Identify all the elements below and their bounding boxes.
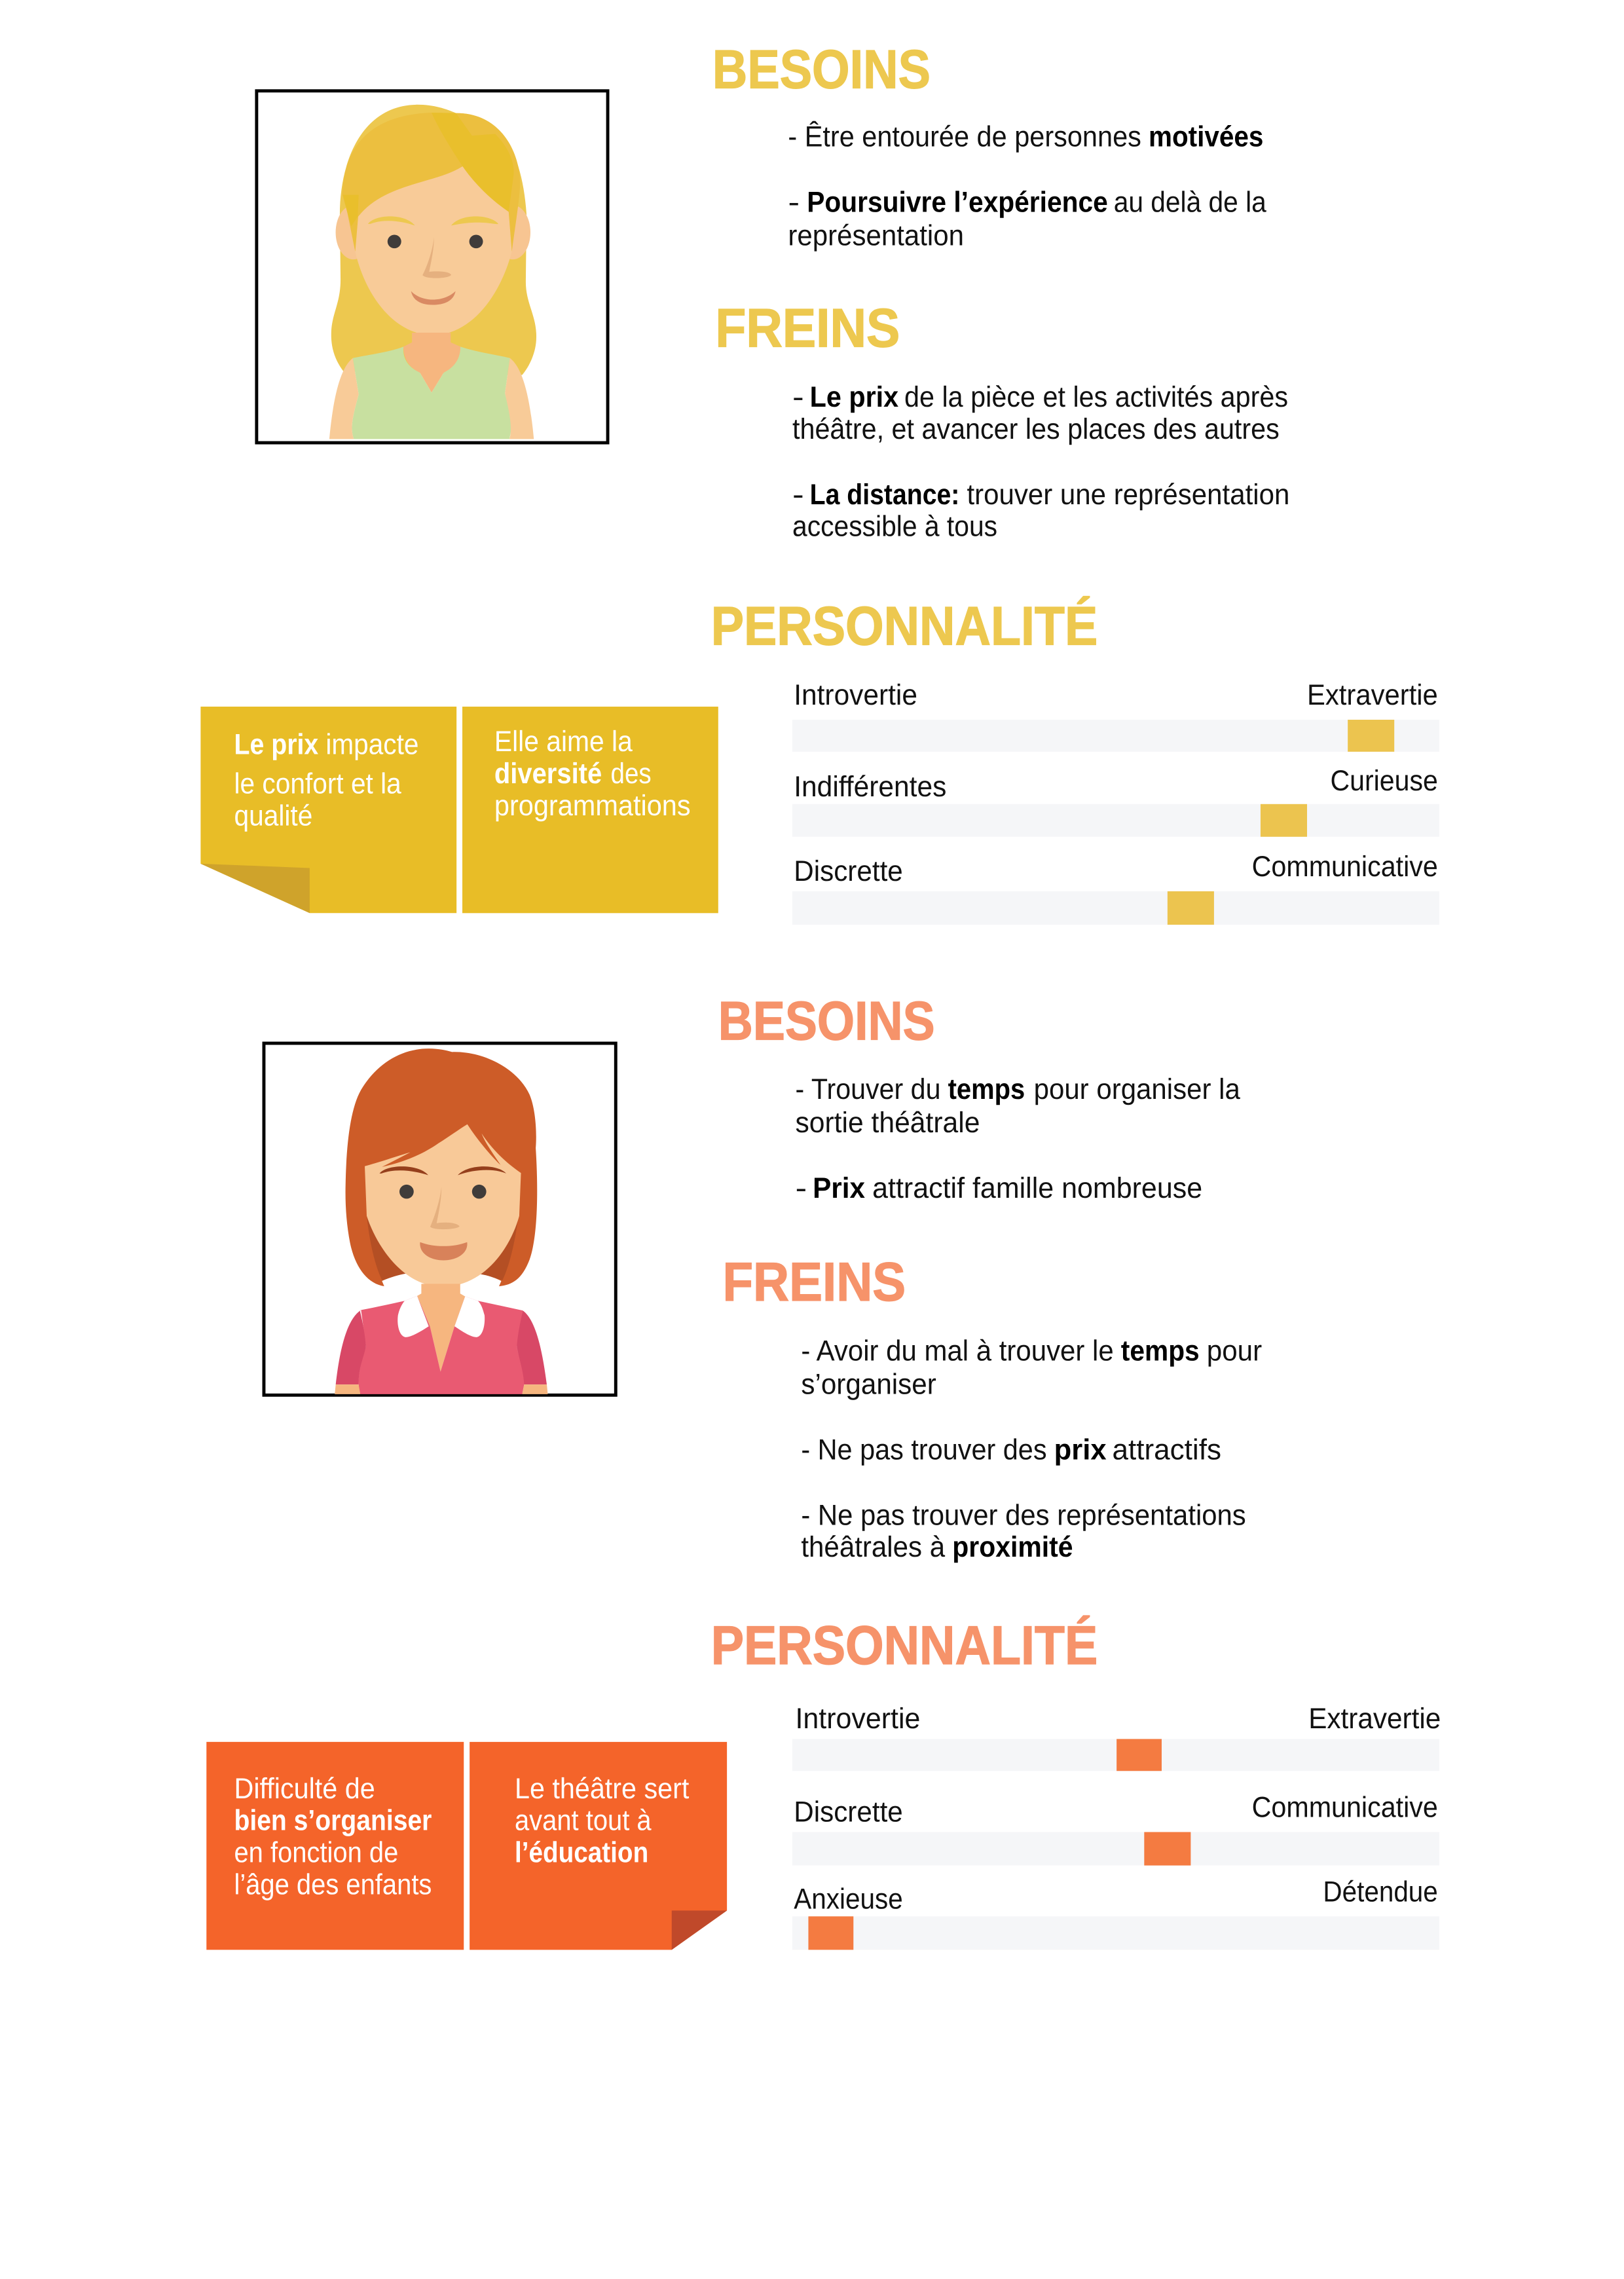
persona 1: obstacles text: Le prix: [810, 382, 898, 414]
persona 2: needs text: [795, 1074, 1242, 1205]
persona 1: note on diversity: programmations: [494, 790, 691, 823]
persona 1: obstacles text: de la pièce et les activités après: [904, 382, 1288, 414]
persona 2: obstacles heading: FREINS: [722, 1251, 906, 1312]
persona 1: needs heading: BESOINS: [712, 39, 931, 100]
persona 2: obstacles text: temps: [1121, 1336, 1200, 1368]
persona 2: obstacles text: s’organiser: [801, 1369, 937, 1401]
persona 2: slider discreet to communicative: Communicative: [1252, 1792, 1438, 1825]
persona 2: obstacles text: pour: [1207, 1336, 1263, 1368]
persona 1: obstacles text: La distance:: [810, 479, 959, 511]
persona 1: slider introvert to extravert: Extravertie: [1307, 680, 1438, 712]
persona 2: slider introvert to extravert: Introvertie: [795, 1703, 920, 1735]
persona 1: needs text: -: [788, 187, 800, 219]
persona 2: personality heading: PERSONNALITÉ: [711, 1615, 1098, 1676]
persona 2: slider discreet to communicative: Discrette: [794, 1797, 903, 1828]
persona 1: obstacles heading: FREINS: [715, 297, 900, 358]
persona 1: slider discreet to communicative: [792, 851, 1439, 925]
persona 1: slider introvert to extravert: [792, 680, 1439, 752]
persona 2: obstacles text: - Avoir du mal à trouver le: [801, 1336, 1114, 1368]
persona 1: needs text: [788, 120, 1268, 253]
persona 2: note on education: [470, 1742, 727, 1950]
persona 1: obstacles text: -: [792, 479, 804, 511]
persona 2: needs text: temps: [948, 1074, 1025, 1106]
persona 1: slider introvert to extravert: Introvertie: [794, 680, 917, 712]
persona 2: needs text: -: [795, 1173, 807, 1205]
persona 2: needs text: Prix: [813, 1173, 865, 1205]
persona 1: obstacles text: trouver une représentation: [967, 479, 1289, 511]
persona 1: slider discreet to communicative: Discrette: [794, 856, 903, 888]
persona 2: slider introvert to extravert: Extravertie: [1308, 1703, 1441, 1735]
persona 1: obstacles text: [792, 382, 1289, 544]
persona 2: note on organisation: en fonction de: [234, 1838, 398, 1870]
persona 2: obstacles text: prix: [1054, 1435, 1107, 1467]
persona 1: note on diversity: Elle aime la: [494, 726, 634, 758]
persona 1: note on price: qualité: [234, 801, 312, 833]
persona 2: portrait of red-haired woman: [264, 1043, 616, 1395]
persona 1: obstacles text: théâtre, et avancer les places des autres: [792, 414, 1280, 446]
persona 1: note on price: impacte: [325, 730, 418, 762]
persona 2: needs text: - Trouver du: [795, 1074, 940, 1106]
persona 1: needs text: Poursuivre l’expérience: [807, 187, 1108, 219]
persona 1: slider indifferent to curious: Indifférentes: [794, 771, 946, 804]
persona 1: obstacles text: accessible à tous: [792, 511, 997, 544]
persona 2: slider introvert to extravert: [792, 1703, 1441, 1771]
persona 2: slider anxious to relaxed: Anxieuse: [794, 1884, 903, 1916]
persona 1: slider indifferent to curious: Curieuse: [1331, 766, 1438, 798]
persona 1: needs text: au delà de la: [1114, 187, 1268, 219]
persona 1: needs text: - Être entourée de personnes: [788, 120, 1141, 154]
persona 2: note on education: Le théâtre sert: [515, 1773, 690, 1806]
persona 2: needs text: pour organiser la: [1034, 1074, 1242, 1106]
persona 2: needs heading: BESOINS: [718, 990, 935, 1051]
persona 1: needs text: représentation: [788, 221, 964, 253]
persona 1: note on price: [200, 707, 456, 913]
persona 2: obstacles text: attractifs: [1112, 1435, 1221, 1467]
persona 1: note on diversity: [462, 707, 718, 913]
persona 2: note on organisation: Difficulté de: [234, 1773, 375, 1806]
persona 2: needs text: attractif famille nombreuse: [872, 1173, 1202, 1205]
persona 2: needs text: sortie théâtrale: [795, 1107, 980, 1140]
persona 1: note on price: Le prix: [234, 730, 318, 762]
persona 1: needs text: motivées: [1149, 122, 1263, 154]
persona 2: obstacles text: [801, 1336, 1263, 1564]
persona 2: note on organisation: [206, 1742, 464, 1950]
persona 2: obstacles text: - Ne pas trouver des: [801, 1435, 1047, 1467]
persona 1: note on price: le confort et la: [234, 769, 403, 801]
persona 1: slider discreet to communicative: Communicative: [1252, 851, 1438, 883]
persona 2: obstacles text: théâtrales à: [801, 1532, 946, 1564]
persona 1: obstacles text: -: [792, 382, 804, 414]
persona 1: portrait of blonde woman: [257, 91, 608, 443]
persona 1: personality heading: PERSONNALITÉ: [711, 595, 1098, 656]
persona 1: note on diversity: des: [610, 758, 652, 790]
persona 2: obstacles text: proximité: [952, 1532, 1073, 1564]
persona 2: note on education: l’éducation: [515, 1838, 648, 1870]
persona 1: note on diversity: diversité: [494, 758, 602, 790]
persona 2: obstacles text: - Ne pas trouver des représentations: [801, 1500, 1246, 1532]
persona 2: slider anxious to relaxed: [792, 1877, 1439, 1950]
persona 2: note on organisation: l’âge des enfants: [234, 1870, 432, 1901]
persona 2: slider discreet to communicative: [792, 1792, 1439, 1866]
persona 1: slider indifferent to curious: [792, 766, 1439, 837]
persona 2: note on education: avant tout à: [515, 1806, 652, 1838]
persona 2: slider anxious to relaxed: Détendue: [1323, 1877, 1438, 1909]
persona 2: note on organisation: bien s’organiser: [234, 1806, 432, 1838]
